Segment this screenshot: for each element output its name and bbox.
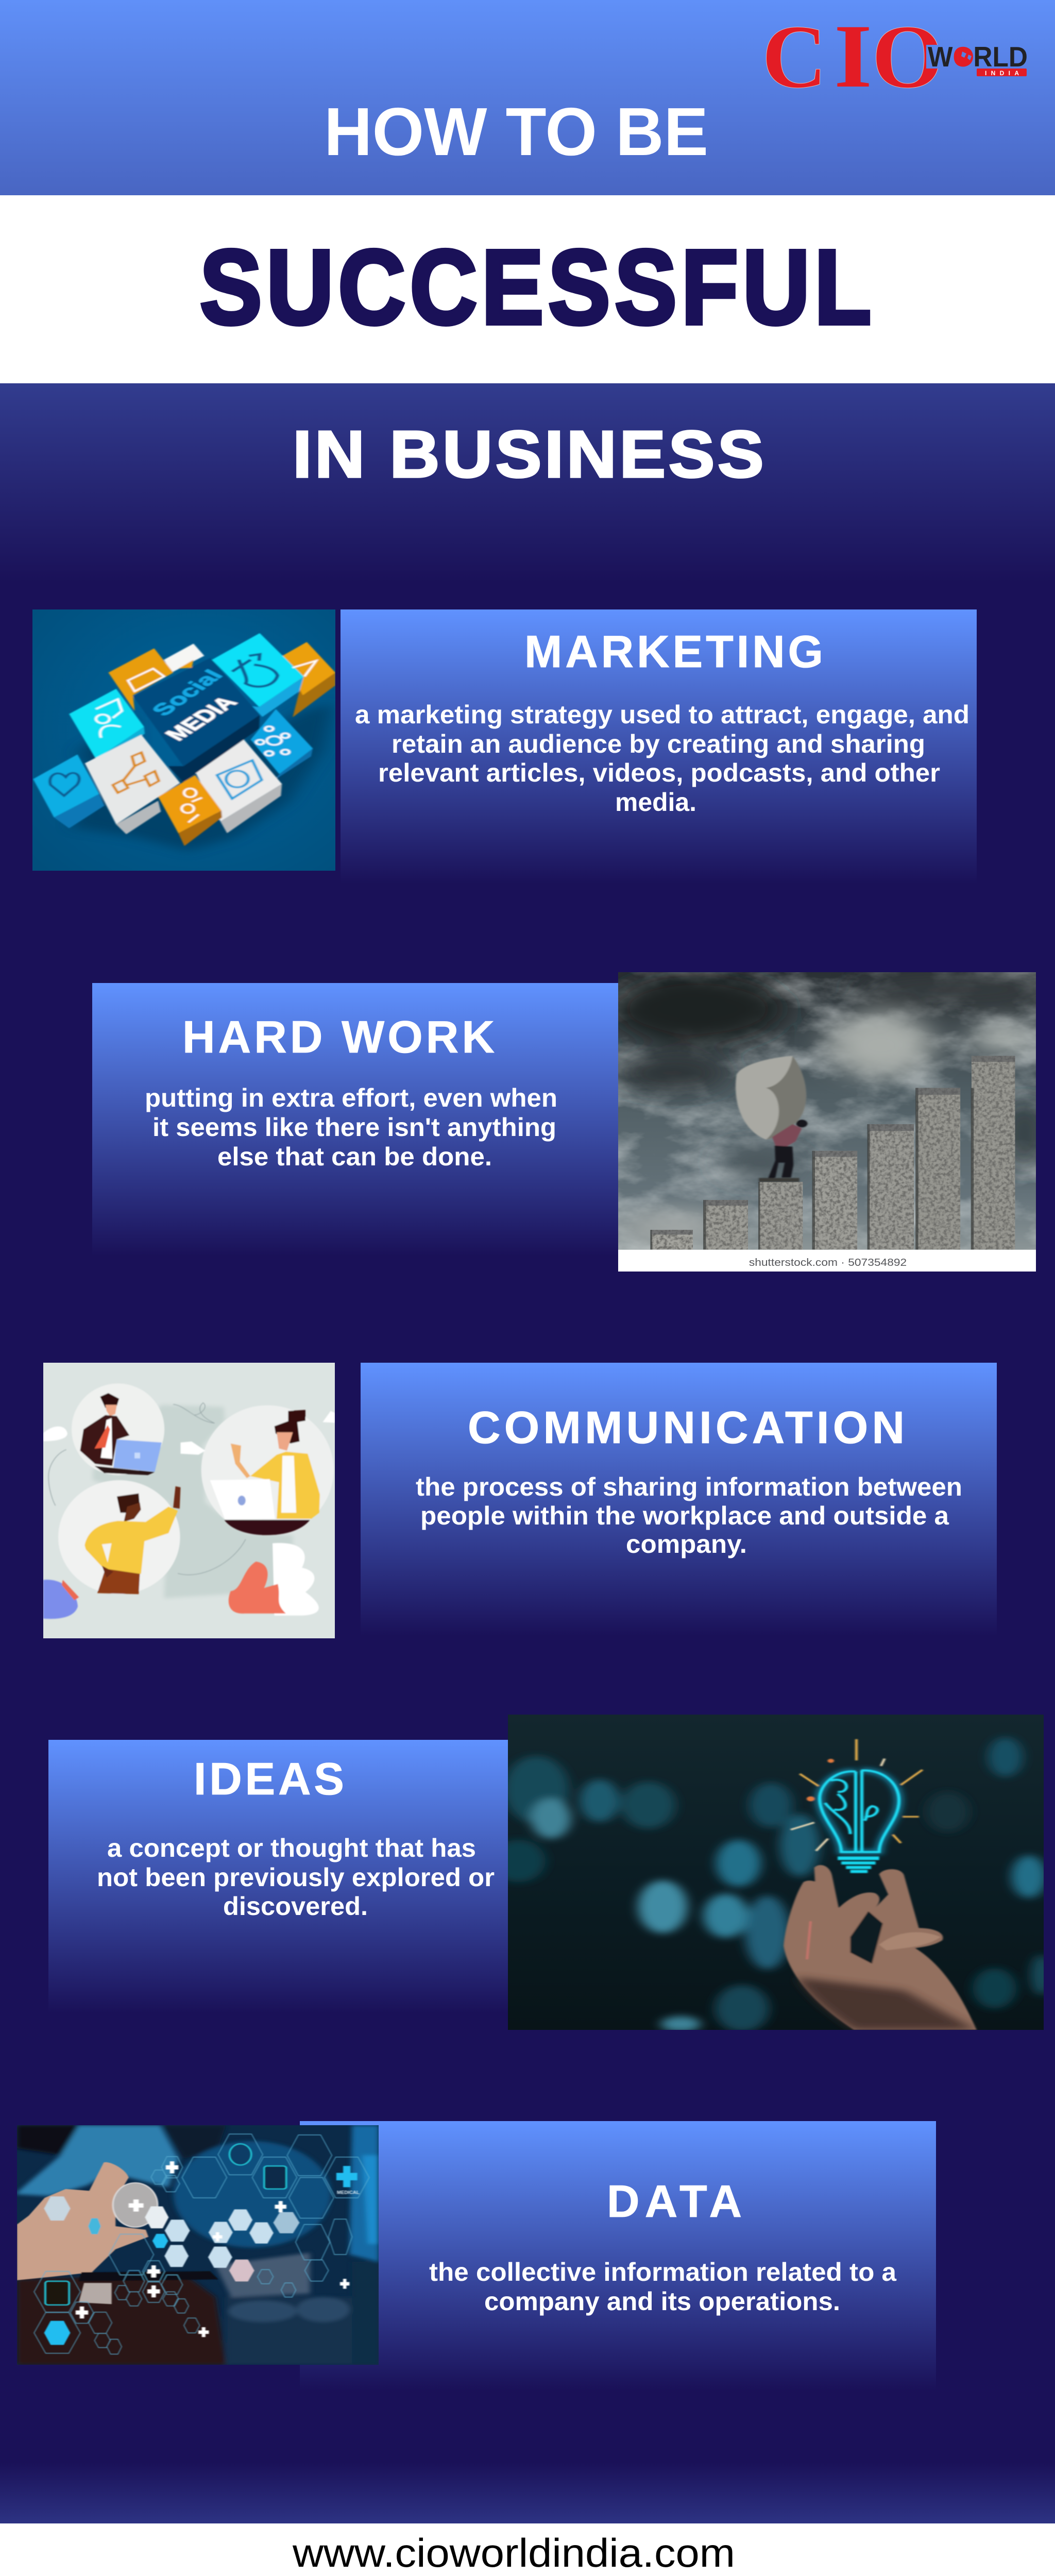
text: hard work description: it seems like there isn't anything [152, 1113, 556, 1142]
image: digital health hexagon network: MEDICAL [337, 2190, 360, 2195]
image: social media blocks [32, 609, 335, 871]
panel: communication [361, 1363, 997, 1636]
logo: CIO World India: O [872, 7, 944, 107]
icon strokes [50, 773, 79, 796]
panel: data [300, 2121, 936, 2390]
section: ideas [48, 1715, 1052, 2032]
section: marketing [32, 609, 977, 884]
panel: marketing [341, 609, 977, 884]
section: data [17, 2121, 936, 2390]
text: communication description: people within the workplace and outside a [420, 1501, 949, 1530]
text: data description: company and its operations. [484, 2287, 840, 2316]
panel: ideas [48, 1740, 508, 2013]
text: data description: the collective information related to a [429, 2258, 897, 2286]
logo: CIO World India: INDIA [985, 70, 1019, 77]
logo: CIO World India [762, 6, 1028, 107]
text: hard work description: putting in extra effort, even when [145, 1083, 557, 1112]
outlined hexagons [34, 2134, 369, 2354]
background: top gradient band [0, 0, 1055, 618]
logo: CIO World India: C [762, 7, 827, 107]
heading: data: DATA [607, 2176, 742, 2227]
heading: marketing: MARKETING [524, 626, 823, 677]
text: marketing description: relevant articles, videos, podcasts, and other [378, 758, 940, 787]
logo: CIO World India: WORLD [928, 41, 1028, 73]
footer: white band with website: www.cioworldindia.com [292, 2530, 735, 2575]
text: communication description: company. [626, 1530, 747, 1558]
footer: gradient band [0, 2463, 1055, 2576]
text: hard work description [145, 1083, 557, 1171]
person two [117, 1494, 140, 1513]
text: data description [429, 2258, 897, 2316]
text: ideas description: not been previously explored or [97, 1863, 495, 1892]
heading: ideas: IDEAS [194, 1753, 344, 1804]
image: people communicating by laptop [43, 1363, 335, 1638]
text: communication description [416, 1472, 962, 1558]
text: communication description: the process of sharing information between [416, 1472, 962, 1501]
image: social media blocks: MEDIA [159, 692, 243, 744]
text: ideas description: discovered. [223, 1892, 368, 1921]
text: hard work description: else that can be done. [217, 1142, 492, 1171]
image: man carrying boulder up stone bars: shutterstock.com · 507354892 [749, 1257, 907, 1268]
filled light hexagons [44, 2196, 299, 2281]
hand [784, 1865, 977, 2030]
title: how to be: HOW TO BE [324, 94, 708, 170]
plants [273, 1543, 319, 1616]
footer: white band with website [0, 2523, 1055, 2576]
text: marketing description: media. [615, 788, 696, 817]
person one [100, 1393, 119, 1408]
title: in business: IN BUSINESS [293, 417, 767, 492]
bulb glow [820, 1770, 899, 1852]
image: glowing lightbulb over a hand [508, 1715, 1044, 2030]
title band: white [0, 195, 1055, 383]
text: ideas description: a concept or thought that has [107, 1834, 476, 1862]
white plus marks [76, 2161, 349, 2337]
text: ideas description [97, 1834, 495, 1921]
logo: CIO World India: I [834, 6, 872, 107]
image: social media blocks: Social [146, 666, 228, 719]
heading: communication: COMMUNICATION [468, 1402, 905, 1453]
panel: hard work [92, 983, 618, 1256]
text: marketing description: a marketing strategy used to attract, engage, and [355, 700, 969, 729]
section: communication [43, 1363, 997, 1638]
image: digital health hexagon network [17, 2125, 379, 2365]
title: successful: SUCCESSFUL [200, 228, 876, 346]
heading: hard work: HARD WORK [182, 1011, 495, 1062]
section: hard work [92, 972, 1055, 1272]
image: man carrying boulder up stone bars [618, 972, 1036, 1272]
person three [275, 1410, 305, 1444]
text: marketing description: retain an audience by creating and sharing [392, 730, 925, 758]
hand [17, 2162, 148, 2280]
text: marketing description [355, 700, 969, 817]
